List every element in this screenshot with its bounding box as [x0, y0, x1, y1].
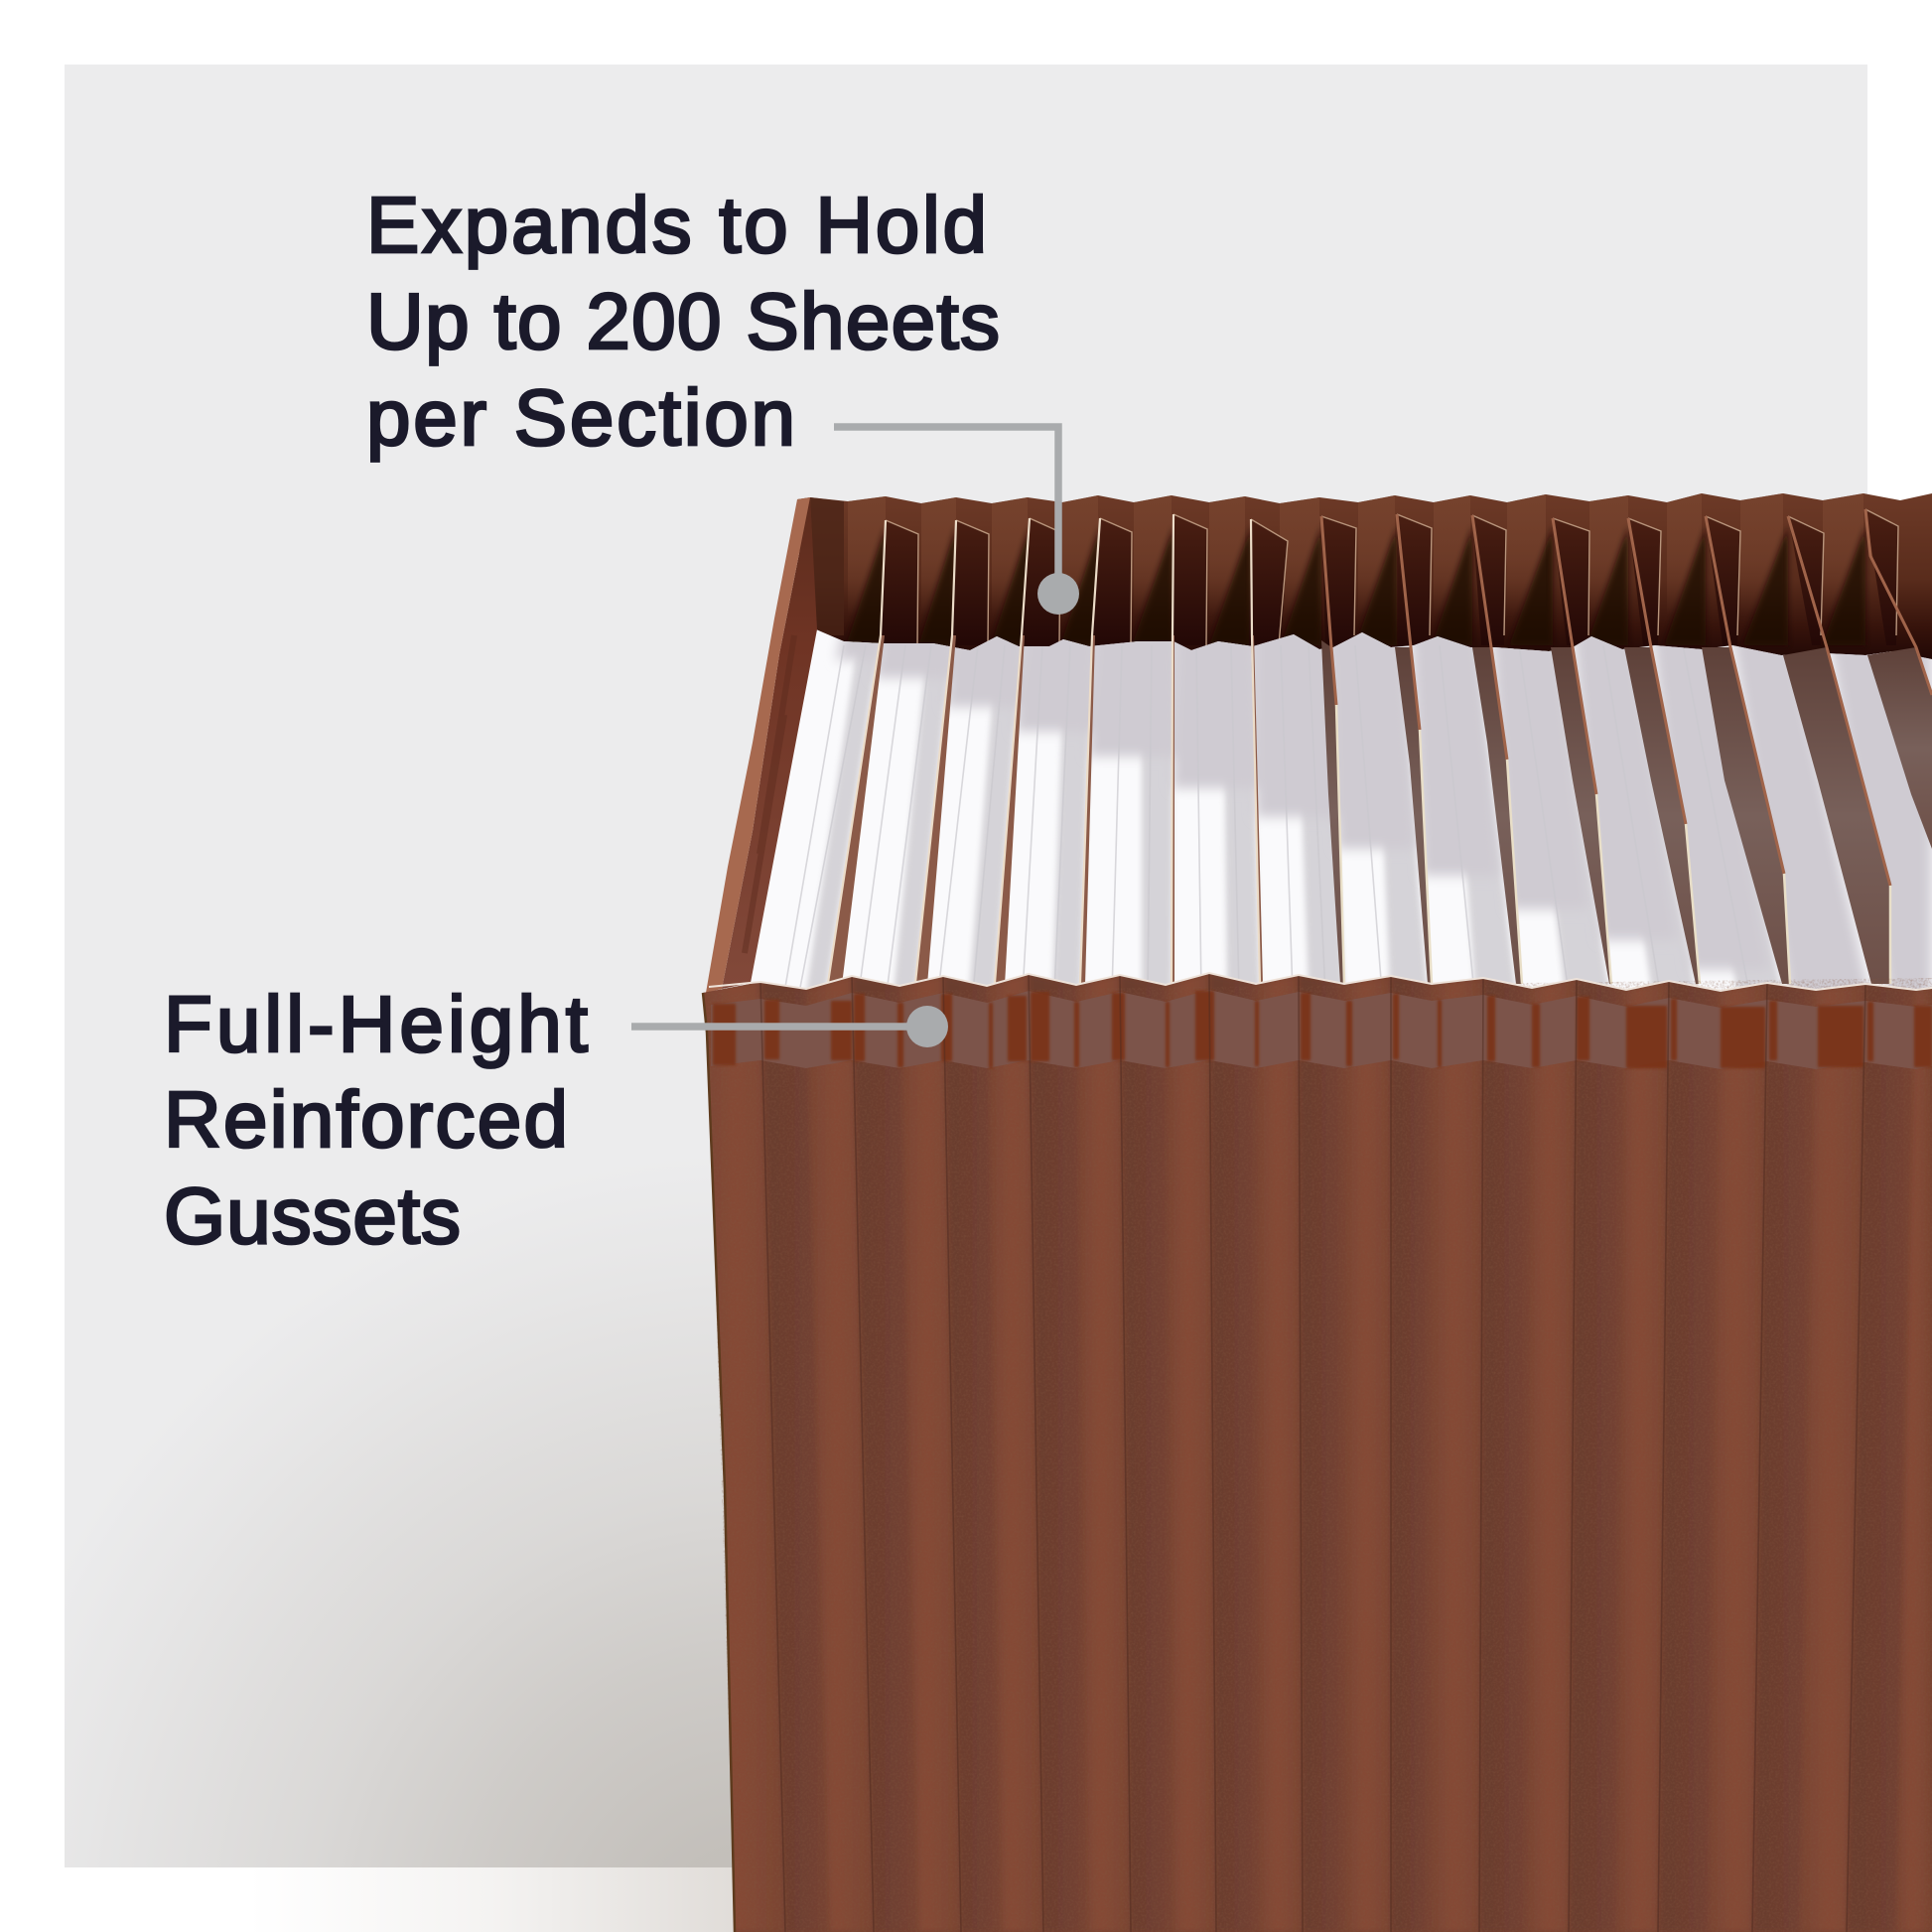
leader line: sheet capacity [834, 427, 1079, 615]
reinforced gusset band [711, 990, 1932, 1069]
callout text: sheet capacity: Up to 200 Sheets [366, 277, 1000, 365]
callout text: gussets: Gussets [164, 1172, 461, 1260]
divider faces [1321, 640, 1932, 984]
front body pleats [695, 963, 1932, 1932]
product: expanding file folder [695, 493, 1932, 1932]
folder left edge [703, 993, 735, 1932]
callout text: sheet capacity [366, 181, 1000, 462]
callout: expands to hold [366, 181, 1079, 615]
cast shadow on backdrop [65, 1092, 759, 1867]
pleat crease lines [760, 973, 1865, 1932]
left side wall [706, 497, 817, 993]
paper top shadows [836, 625, 1932, 1003]
callout text: sheet capacity: per Section [366, 373, 795, 462]
paper sheet streaks [784, 645, 1749, 993]
body grain texture [707, 978, 1932, 1932]
divider edges, right group [1321, 509, 1932, 984]
stacked paper [751, 629, 1932, 990]
divider edges, left group [828, 514, 1263, 985]
back wall of folder [797, 493, 1932, 665]
callout text: gussets [164, 980, 588, 1260]
cast shadow below backdrop [199, 1867, 759, 1932]
callout text: gussets: Reinforced [164, 1075, 568, 1164]
divider tabs [880, 509, 1898, 645]
paper right-side shading [806, 635, 1782, 993]
callout: reinforced gussets [164, 980, 948, 1260]
leader line: gussets [631, 1006, 948, 1047]
folder top edge highlight [709, 973, 1932, 991]
callout text: sheet capacity: Expands to Hold [366, 181, 987, 269]
glossy glare patches [713, 991, 1932, 1068]
callout text: gussets: Full-Height [164, 980, 588, 1068]
